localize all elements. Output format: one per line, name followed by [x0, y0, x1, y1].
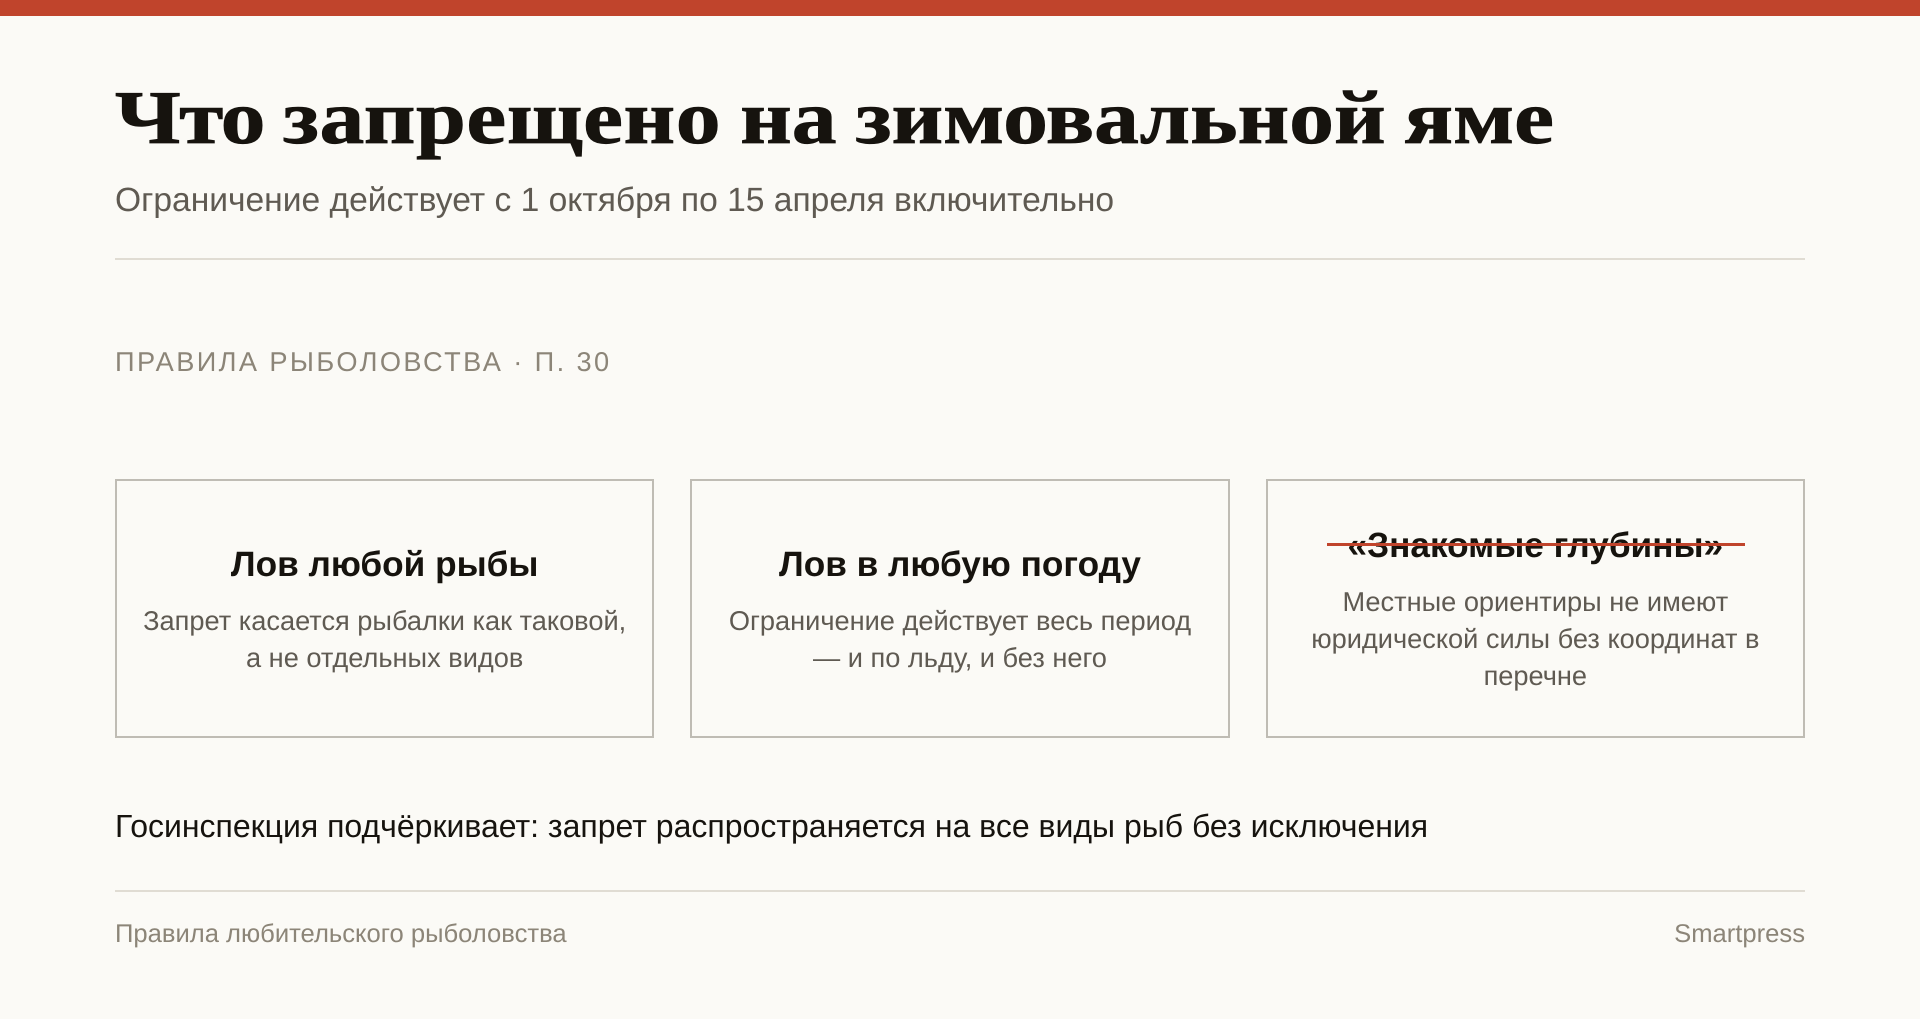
card 3 text: перечне — [1484, 660, 1587, 690]
card 1 text: Запрет касается рыбалки как таковой, — [143, 605, 626, 636]
card 2 text — [729, 605, 1191, 673]
card 3 text — [1311, 586, 1759, 691]
panel: card 3 — [1266, 479, 1805, 738]
footer divider — [115, 890, 1805, 892]
card 2 heading: Лов в любую погоду — [779, 544, 1141, 584]
card 3 text: юридической силы без координат в — [1311, 622, 1759, 654]
footer source: Правила любительского рыболовства — [115, 920, 567, 948]
panel: card 2 — [690, 479, 1230, 738]
panel: card 1 — [115, 479, 654, 738]
card 1 text — [143, 605, 626, 673]
card 2 text: Ограничение действует весь период — [729, 605, 1191, 636]
card 3 text: Местные ориентиры не имеют — [1342, 586, 1728, 616]
card 3 heading struck through: «Знакомые глубины» — [1348, 526, 1723, 564]
top accent bar — [0, 0, 1920, 16]
section label: ПРАВИЛА РЫБОЛОВСТВА · П. 30 — [115, 346, 612, 377]
card 2 text: — и по льду, и без него — [813, 642, 1107, 673]
header divider — [115, 258, 1805, 260]
card 1 text: а не отдельных видов — [246, 642, 523, 673]
title: Что запрещено на зимовальной яме — [115, 76, 1554, 160]
subtitle: Ограничение действует с 1 октября по 15 апреля включительно — [115, 182, 1114, 219]
footer brand: Smartpress — [1674, 920, 1805, 948]
card 1 heading: Лов любой рыбы — [231, 544, 538, 584]
note: Госинспекция подчёркивает: запрет распространяется на все виды рыб без исключения — [115, 808, 1428, 844]
strike line — [1327, 543, 1745, 546]
